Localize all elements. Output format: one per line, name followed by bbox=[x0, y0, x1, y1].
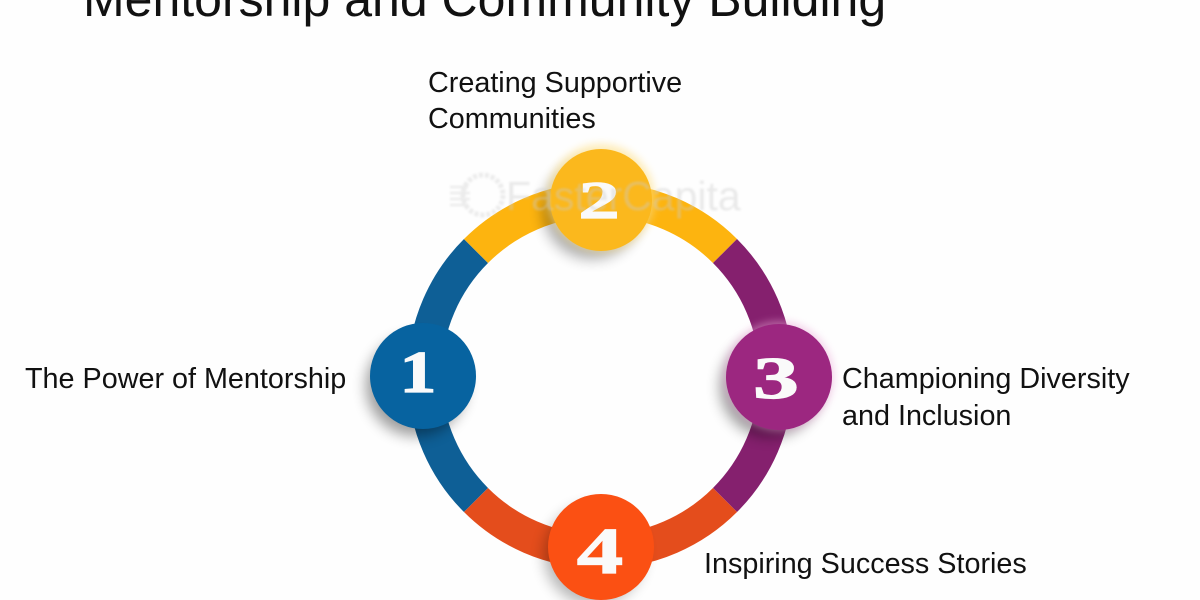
ring segment: orange bbox=[476, 500, 725, 552]
node 4 bbox=[544, 494, 654, 600]
label 3: Championing Diversity bbox=[842, 363, 1130, 395]
watermark: FasterCapita bbox=[506, 173, 741, 219]
label 2: Creating Supportive bbox=[428, 67, 682, 99]
node 2 bbox=[543, 144, 655, 259]
label 4: Inspiring Success Stories bbox=[704, 548, 1027, 580]
label 1: The Power of Mentorship bbox=[25, 363, 346, 395]
label 3: and Inclusion bbox=[842, 400, 1011, 432]
ring segment: yellow bbox=[476, 199, 725, 251]
node 1: 1 bbox=[400, 340, 436, 405]
node 2: 2 bbox=[578, 170, 620, 230]
node 1 bbox=[366, 323, 476, 436]
node 3: 3 bbox=[753, 345, 799, 411]
ring diagram bbox=[366, 144, 834, 600]
node 3 bbox=[720, 321, 834, 437]
ring segment: purple bbox=[725, 251, 777, 500]
ring segment: blue bbox=[424, 251, 476, 500]
label 2: Communities bbox=[428, 103, 596, 135]
node 4: 4 bbox=[577, 515, 623, 588]
